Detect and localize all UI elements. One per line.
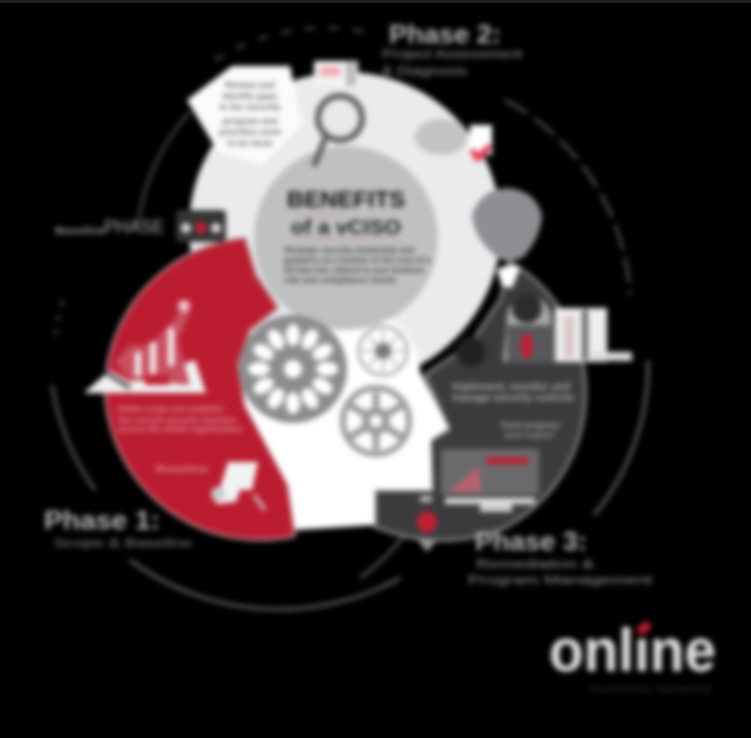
center circle: benefits bbox=[254, 146, 438, 330]
icon: small gear top bbox=[359, 327, 407, 375]
callout: hexagon note: in the security bbox=[219, 102, 281, 112]
heading: phase 2 bbox=[382, 19, 523, 78]
icon: mountain chart bbox=[84, 300, 206, 393]
chart: monitor bbox=[441, 449, 539, 512]
panel: phase 2 light circle bbox=[189, 72, 501, 384]
callout: hexagon note: to be done bbox=[227, 138, 273, 148]
panel: phase 3 dark circle bbox=[375, 262, 585, 540]
icon: large gear bbox=[239, 315, 347, 423]
icon: padlock bbox=[503, 293, 554, 363]
heading: phase 1: Phase 1: bbox=[44, 505, 160, 535]
center circle: benefits: of a vCISO bbox=[291, 217, 401, 239]
icon: dark circle bbox=[456, 337, 486, 367]
logo: online bbox=[549, 617, 716, 684]
heading: phase 3: Program Management bbox=[468, 575, 653, 587]
orbit arcs bbox=[52, 28, 648, 609]
callout: hexagon note: Review and bbox=[225, 80, 275, 90]
phase 1 text block: Baseline bbox=[156, 464, 208, 475]
icon: document with key bbox=[211, 462, 265, 510]
phase 3 text block bbox=[452, 381, 574, 440]
body text: Strategic security leadership and bbox=[284, 245, 414, 255]
phase 1 text block: the current security baseline bbox=[118, 415, 236, 426]
label: phase tag bbox=[55, 217, 164, 237]
icon: shield bbox=[472, 188, 542, 288]
label: phase tag: Baseline bbox=[55, 226, 106, 237]
head silhouette bbox=[240, 315, 449, 530]
icon: phase tag box bbox=[176, 210, 226, 242]
heading: phase 3: Remediation & bbox=[476, 559, 595, 571]
logo: business systems bbox=[590, 684, 713, 694]
callout: hexagon note: program and bbox=[222, 116, 278, 126]
icon: monitor stand marker bbox=[417, 496, 437, 552]
heading: phase 1: Scope & Baseline bbox=[54, 538, 192, 550]
icon: red check tab bbox=[470, 125, 492, 158]
callout: hexagon note: prioritise work bbox=[219, 127, 282, 137]
heading: phase 3: Phase 3: bbox=[475, 526, 587, 556]
body text: full time hire, tailored to your business bbox=[284, 265, 424, 275]
icon: document bbox=[555, 308, 632, 362]
phase 3 text block: Implement, monitor and bbox=[452, 381, 570, 393]
callout: hexagon note: identify gaps bbox=[222, 91, 278, 101]
phase 1 text block bbox=[118, 404, 242, 475]
heading: phase 3 bbox=[468, 526, 653, 587]
heading: phase 1 bbox=[44, 505, 192, 550]
icon: magnifier bbox=[314, 61, 362, 166]
heading: phase 2: Project Assessment bbox=[382, 49, 523, 61]
body text bbox=[284, 245, 431, 285]
label: phase tag: PHASE bbox=[104, 217, 164, 237]
body text: guidance at a fraction of the cost of a bbox=[284, 255, 431, 265]
phase 1 text block: Define scope and establish bbox=[118, 404, 223, 415]
phase 3 text block: manage security controls bbox=[452, 392, 574, 404]
icon: medium gear bbox=[343, 388, 409, 454]
body text: risk and compliance needs bbox=[284, 275, 396, 285]
phase 1 text block: across the whole organisation bbox=[118, 424, 242, 435]
heading: benefits of a vCISO: BENEFITS bbox=[287, 187, 405, 212]
callout: hexagon note bbox=[187, 66, 302, 165]
heading: phase 2: Phase 2: bbox=[389, 19, 501, 49]
icon: grey oval bbox=[415, 119, 467, 155]
panel: phase 1 red circle bbox=[105, 238, 295, 540]
phase 3 text block: and report bbox=[504, 430, 554, 440]
phase 3 text block: Track progress bbox=[500, 420, 560, 430]
heading: phase 2: & Diagnosis bbox=[382, 66, 467, 78]
